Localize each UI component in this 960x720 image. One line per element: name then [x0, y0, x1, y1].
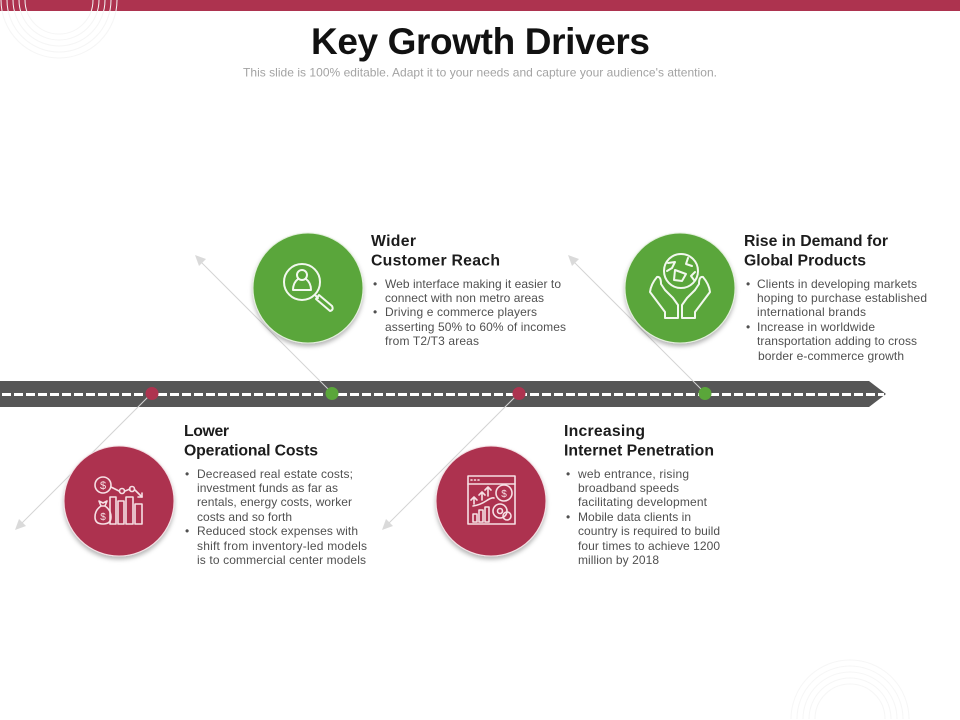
bullet list: Reduced stock expenses with [197, 524, 358, 538]
timeline marker: lower operational costs [146, 387, 158, 400]
timeline marker: internet penetration [512, 387, 526, 400]
bullet list: Mobile data clients in [578, 510, 691, 524]
heading: Wider [371, 233, 416, 250]
panel: wider customer reach [253, 233, 566, 348]
bullet list: • [746, 277, 750, 291]
top accent bar [0, 0, 960, 11]
bullet list: from T2/T3 areas [385, 334, 479, 348]
heading: Increasing [564, 423, 645, 440]
bullet list: connect with non metro areas [385, 291, 544, 305]
bullet list: costs and so forth [197, 510, 292, 524]
panel: lower operational costs [64, 423, 367, 567]
arrow: lower operational costs leader [15, 393, 152, 530]
panel: increasing internet penetration [436, 423, 720, 567]
bullet list: is to commercial center models [197, 553, 366, 567]
icon: browser window with growth chart: $ [501, 489, 507, 500]
icon: browser window with growth chart [436, 446, 546, 556]
decorative rings top left [1, 0, 117, 58]
bullet list: million by 2018 [578, 553, 659, 567]
heading: Rise in Demand for [744, 233, 888, 250]
bullet list: country is required to build [578, 524, 720, 538]
bullet list: asserting 50% to 60% of incomes [385, 320, 566, 334]
bullet list [185, 467, 367, 567]
title: Key Growth Drivers [311, 21, 650, 62]
heading: Lower [184, 423, 229, 440]
bullet list: investment funds as far as [197, 481, 338, 495]
icon: hands holding globe [625, 233, 735, 343]
bullet list: • [566, 510, 570, 524]
bullet list: Increase in worldwide [757, 320, 875, 334]
bullet list: • [185, 467, 189, 481]
bullet list: • [185, 524, 189, 538]
bullet list [746, 277, 927, 363]
bullet list: Web interface making it easier to [385, 277, 561, 291]
bullet list: hoping to purchase established [757, 291, 927, 305]
timeline marker: global products [698, 387, 712, 400]
subtitle: This slide is 100% editable. Adapt it to your needs and capture your audience's attention. [243, 66, 717, 80]
bullet list: • [566, 467, 570, 481]
bullet list: facilitating development [578, 495, 708, 509]
bullet list: • [373, 305, 377, 319]
bullet list: Decreased real estate costs; [197, 467, 353, 481]
bullet list [373, 277, 566, 348]
icon: money bag and falling bars [64, 446, 174, 556]
bullet list: • [373, 277, 377, 291]
bullet list: four times to achieve 1200 [578, 539, 720, 553]
bullet list [566, 467, 720, 567]
arrow: wider customer reach leader [195, 255, 332, 393]
road timeline [0, 381, 886, 407]
arrow: global products leader [568, 255, 705, 393]
bullet list: Driving e commerce players [385, 305, 537, 319]
bullet list: shift from inventory-led models [197, 539, 367, 553]
panel: increasing internet penetration: Internet Penetration [564, 442, 714, 460]
icon: money bag and falling bars: $ [100, 512, 106, 523]
timeline marker: wider customer reach [326, 387, 338, 400]
icon: magnifier with person [253, 233, 363, 343]
bullet list: • [746, 320, 750, 334]
icon: money bag and falling bars: $ [100, 480, 106, 492]
panel: rise in demand for global products: Global Products [744, 252, 866, 270]
bullet list: web entrance, rising [577, 467, 689, 481]
decorative rings bottom right [791, 660, 909, 719]
bullet list: rentals, energy costs, worker [197, 495, 352, 509]
bullet list: Clients in developing markets [757, 277, 917, 291]
bullet list: broadband speeds [578, 481, 679, 495]
panel: lower operational costs: Operational Costs [184, 442, 318, 460]
panel: rise in demand for global products [625, 233, 927, 363]
arrow: internet penetration leader [382, 393, 519, 530]
bullet list: international brands [757, 305, 866, 319]
panel: wider customer reach: Customer Reach [371, 252, 500, 270]
bullet list: transportation adding to cross [757, 334, 917, 348]
bullet list: border e-commerce growth [758, 349, 904, 363]
